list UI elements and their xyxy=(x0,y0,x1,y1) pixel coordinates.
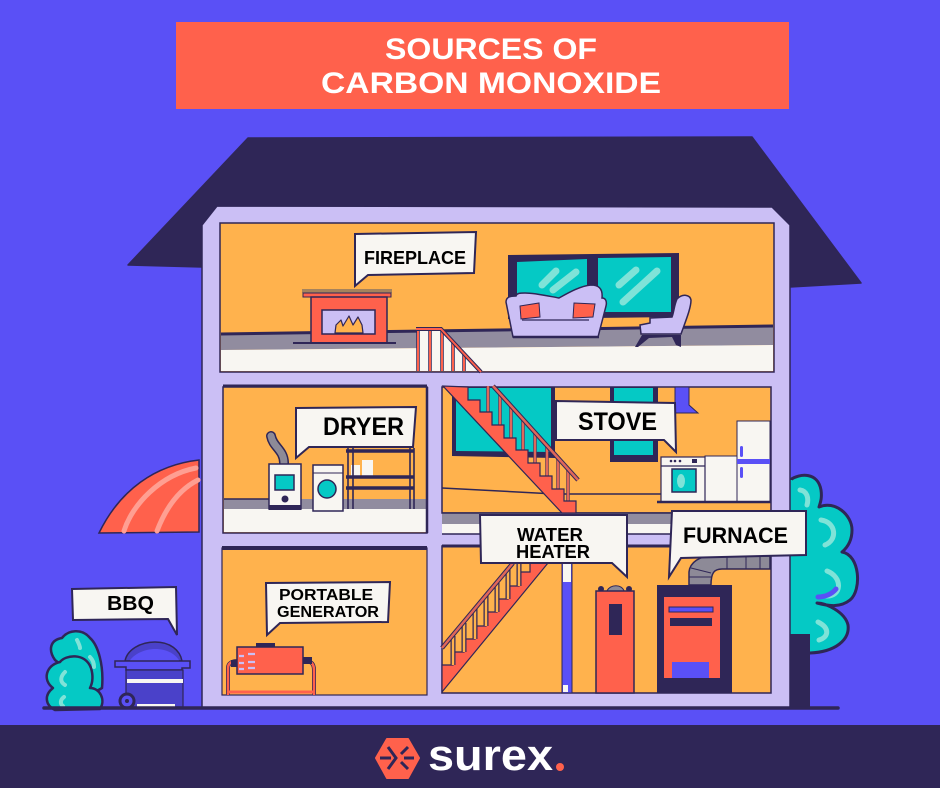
lower staircase xyxy=(442,563,548,692)
panel: kitchen xyxy=(442,386,771,534)
cabinet xyxy=(705,456,737,502)
kitchen right window xyxy=(610,387,658,462)
bush xyxy=(47,631,102,710)
upstairs railing xyxy=(416,329,481,372)
fridge xyxy=(737,421,770,502)
callout: water heater: WATER xyxy=(517,525,583,545)
panel: garage xyxy=(222,548,427,695)
title banner: CARBON MONOXIDE xyxy=(321,67,661,100)
callout: portable generator: PORTABLE xyxy=(279,587,373,604)
furnace duct xyxy=(689,556,770,585)
ground line xyxy=(44,706,838,710)
callout: dryer xyxy=(296,407,416,458)
callout: stove: STOVE xyxy=(578,408,657,436)
kitchen left window xyxy=(452,387,555,458)
logo wordmark: surex xyxy=(428,731,554,780)
callout: furnace: FURNACE xyxy=(683,523,788,548)
tree xyxy=(784,475,858,708)
portable generator xyxy=(228,643,314,695)
title banner xyxy=(176,22,789,109)
icon: surex logo xyxy=(376,739,419,778)
callout: fireplace xyxy=(355,232,476,286)
window xyxy=(508,253,679,319)
callout: water heater xyxy=(480,515,627,577)
water heater appliance xyxy=(596,586,634,693)
callout: fireplace: FIREPLACE xyxy=(364,248,466,268)
callout: bbq: BBQ xyxy=(107,593,154,615)
fireplace xyxy=(293,289,396,343)
umbrella awning xyxy=(99,460,199,533)
panel: laundry room xyxy=(223,386,427,533)
callout: furnace xyxy=(669,511,806,577)
callout: dryer: DRYER xyxy=(323,413,404,441)
range hood xyxy=(675,387,698,413)
dryer xyxy=(269,464,301,510)
callout: bbq xyxy=(72,587,177,635)
title banner: SOURCES OF xyxy=(385,33,597,66)
upper staircase xyxy=(443,386,578,513)
panel: basement xyxy=(442,546,771,693)
washing machine xyxy=(313,465,343,511)
bbq grill xyxy=(115,642,190,708)
house body xyxy=(202,206,790,708)
roof xyxy=(128,137,861,287)
callout: portable generator xyxy=(266,582,390,635)
callout: water heater: HEATER xyxy=(516,542,590,562)
callout: stove xyxy=(556,401,676,452)
shelf unit xyxy=(346,448,414,509)
support post xyxy=(562,560,572,693)
footer band xyxy=(0,725,940,788)
dryer duct xyxy=(271,436,284,463)
logo dot xyxy=(556,763,564,771)
sofa xyxy=(506,285,606,337)
stove appliance xyxy=(661,457,705,502)
furnace appliance xyxy=(657,585,732,693)
callout: portable generator: GENERATOR xyxy=(277,604,379,621)
panel: top floor living room xyxy=(220,223,774,372)
armchair xyxy=(635,295,691,347)
